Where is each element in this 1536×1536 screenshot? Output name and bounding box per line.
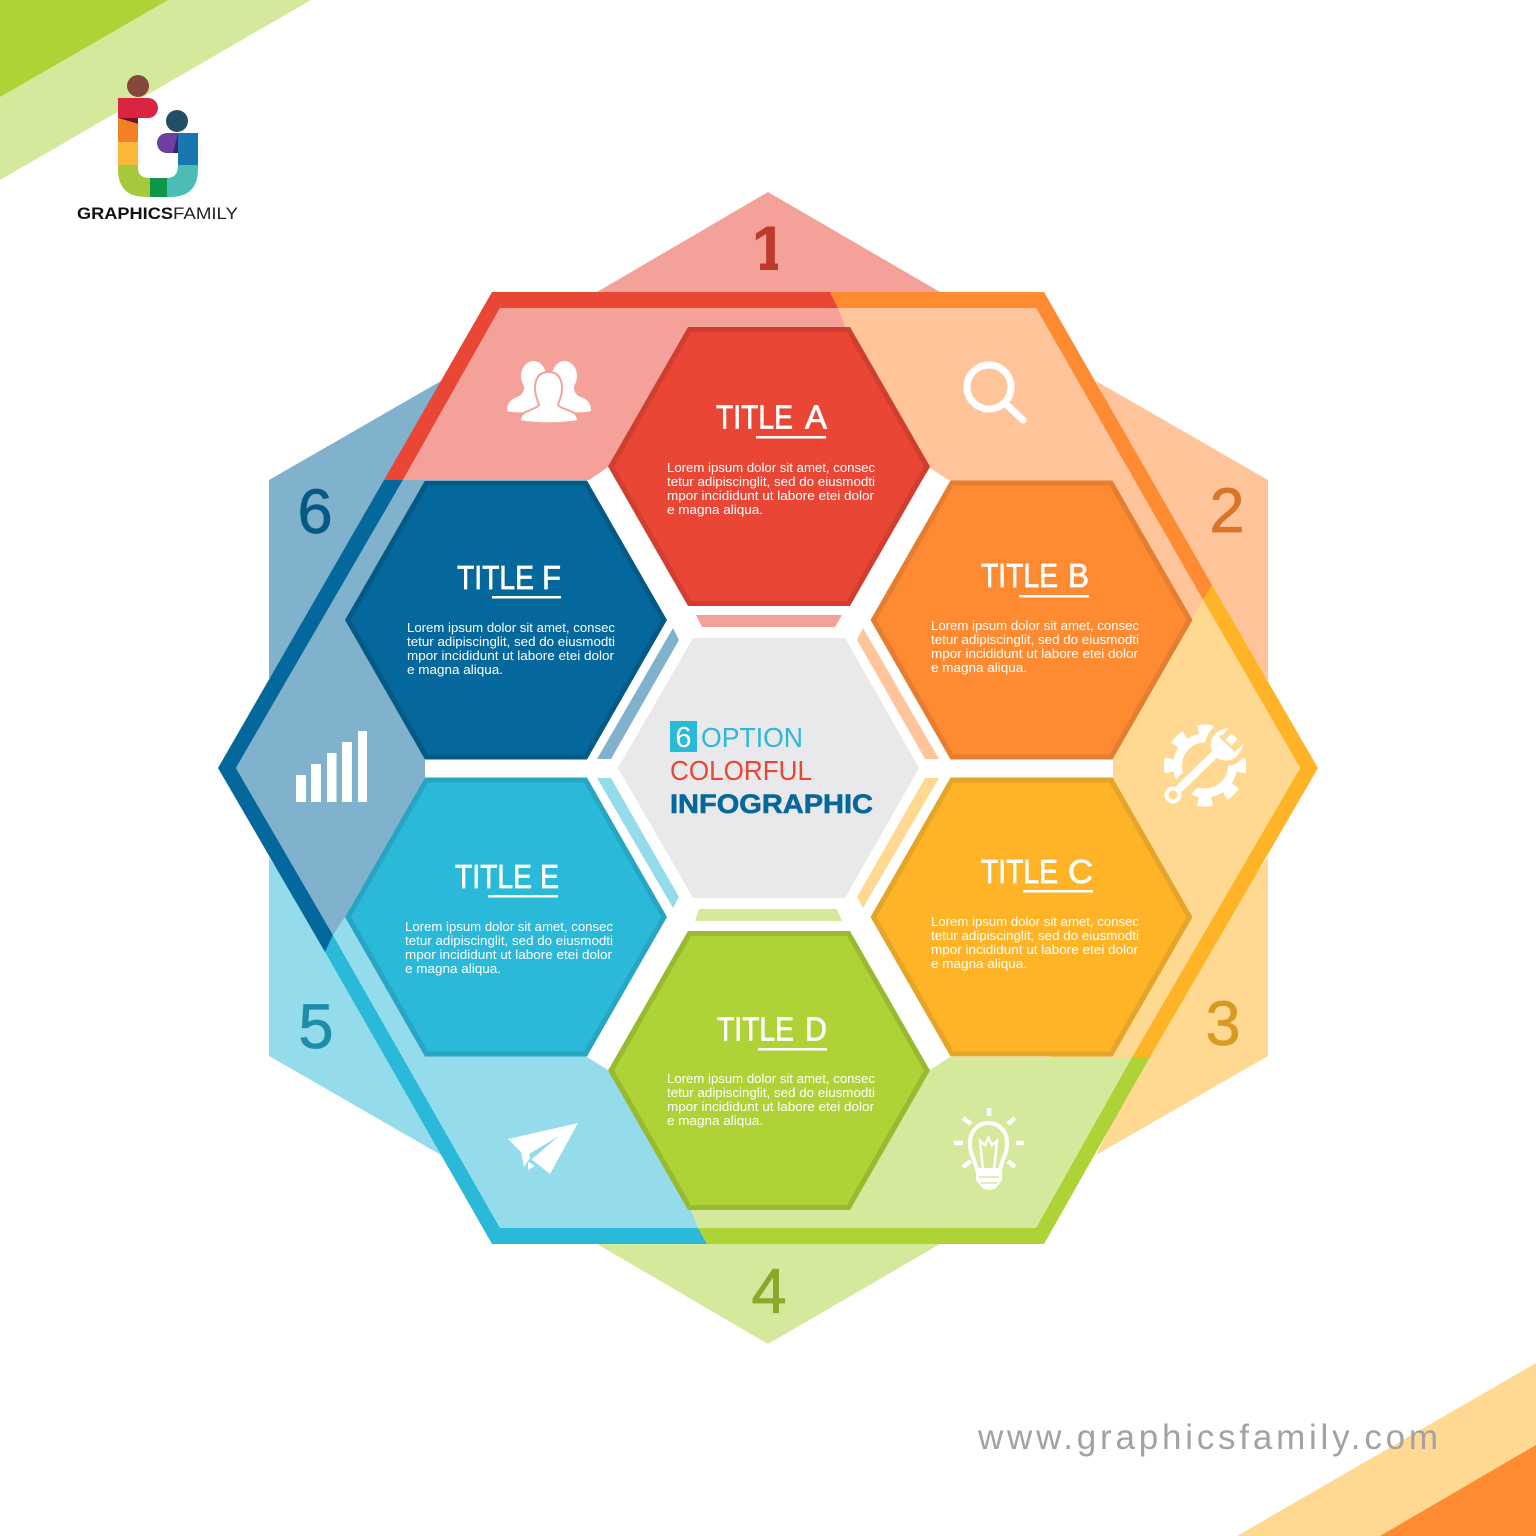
hexagon B: TITLE xyxy=(981,557,1058,594)
hexagon E: Lorem ipsum dolor sit amet, consec xyxy=(405,919,613,934)
hexagon B: B xyxy=(1068,557,1089,594)
center hexagon xyxy=(618,638,919,898)
hexagon C: C xyxy=(1068,853,1093,890)
outer hexagon piece 2 xyxy=(1096,381,1268,681)
hexagon B xyxy=(870,480,1192,760)
icon: magnifier xyxy=(967,365,1023,420)
hexagon F: TITLE xyxy=(457,559,534,596)
hexagon A: A xyxy=(805,398,827,436)
number 4: 4 xyxy=(751,1257,787,1327)
hexagon B: Lorem ipsum dolor sit amet, consec xyxy=(931,618,1139,633)
hexagon F: F xyxy=(542,559,561,596)
segment 6 panel xyxy=(218,480,425,952)
trapezoid: green xyxy=(695,909,842,921)
segment 5 panel xyxy=(325,917,707,1244)
segment 1 panel xyxy=(384,292,850,480)
hexagon D: mpor incididunt ut labore etei dolor xyxy=(667,1099,875,1114)
segment 4 panel xyxy=(680,1057,1150,1244)
icon: paper plane xyxy=(508,1123,578,1174)
hexagon E: mpor incididunt ut labore etei dolor xyxy=(405,947,613,962)
hexagon E: e magna aliqua. xyxy=(405,961,501,976)
hexagon C xyxy=(870,778,1192,1056)
outer hexagon piece 1 xyxy=(597,192,940,330)
trapezoid: yellow xyxy=(857,778,939,908)
hexagon E: E xyxy=(540,858,559,895)
hexagon C: mpor incididunt ut labore etei dolor xyxy=(931,942,1139,957)
trapezoid: cyan xyxy=(597,778,679,908)
logo: FAMILY xyxy=(173,204,238,223)
hexagon A: tetur adipiscinglit, sed do eiusmodti xyxy=(667,474,875,489)
hexagon A xyxy=(608,327,930,606)
number 6: 6 xyxy=(297,477,333,547)
outer hexagon piece 3 xyxy=(1096,857,1268,1155)
trapezoid: dark blue xyxy=(597,628,679,759)
icon: gear and wrench xyxy=(1166,724,1247,804)
icon: people xyxy=(507,361,591,423)
trapezoid: red xyxy=(696,615,842,627)
hexagon A: mpor incididunt ut labore etei dolor xyxy=(667,488,875,503)
hexagon E: tetur adipiscinglit, sed do eiusmodti xyxy=(405,933,613,948)
logo xyxy=(77,75,238,223)
number 5: 5 xyxy=(298,992,334,1062)
hexagon B: tetur adipiscinglit, sed do eiusmodti xyxy=(931,632,1139,647)
icon: bars xyxy=(296,731,367,802)
hexagon D: Lorem ipsum dolor sit amet, consec xyxy=(667,1071,875,1086)
hexagon A: e magna aliqua. xyxy=(667,502,763,517)
outer hexagon piece 5 xyxy=(269,857,441,1155)
hexagon D: tetur adipiscinglit, sed do eiusmodti xyxy=(667,1085,875,1100)
hexagon A: TITLE xyxy=(716,398,793,436)
outer hexagon piece 6 xyxy=(269,381,441,679)
hexagon C: tetur adipiscinglit, sed do eiusmodti xyxy=(931,928,1139,943)
segment 2 panel xyxy=(830,292,1212,760)
number 1: 1 xyxy=(751,214,787,284)
hexagon C: e magna aliqua. xyxy=(931,956,1027,971)
hexagon F: Lorem ipsum dolor sit amet, consec xyxy=(407,620,615,635)
segment 3 panel xyxy=(1050,585,1318,1057)
logo: GRAPHICS xyxy=(77,204,173,223)
center title: COLORFUL xyxy=(670,755,812,786)
corner decoration: top left xyxy=(0,0,311,180)
hexagon D: TITLE xyxy=(717,1010,794,1048)
hexagon B: mpor incididunt ut labore etei dolor xyxy=(931,646,1139,661)
icon: light bulb xyxy=(954,1108,1024,1190)
outer hexagon piece 4 xyxy=(597,1210,940,1344)
hexagon C: Lorem ipsum dolor sit amet, consec xyxy=(931,914,1139,929)
hexagon A: Lorem ipsum dolor sit amet, consec xyxy=(667,460,875,475)
number 3: 3 xyxy=(1205,989,1241,1059)
corner decoration: bottom right xyxy=(1237,1363,1536,1536)
hexagon D: D xyxy=(805,1010,827,1048)
hexagon F xyxy=(345,480,667,760)
trapezoid: orange xyxy=(857,628,939,759)
hexagon F: mpor incididunt ut labore etei dolor xyxy=(407,648,615,663)
number 2: 2 xyxy=(1209,476,1245,546)
hexagon E xyxy=(345,778,667,1056)
center title: INFOGRAPHIC xyxy=(670,789,873,819)
center title: OPTION xyxy=(701,722,803,753)
website url: www.graphicsfamily.com xyxy=(977,1418,1438,1457)
hexagon F: tetur adipiscinglit, sed do eiusmodti xyxy=(407,634,615,649)
white gaps between hexagons xyxy=(425,759,1113,778)
hexagon F: e magna aliqua. xyxy=(407,662,503,677)
hexagon E: TITLE xyxy=(455,858,532,895)
hexagon B: e magna aliqua. xyxy=(931,660,1027,675)
hexagon D xyxy=(608,931,930,1210)
center title xyxy=(670,721,873,819)
hexagon C: TITLE xyxy=(981,853,1058,890)
hexagon D: e magna aliqua. xyxy=(667,1113,763,1128)
center title: 6 xyxy=(675,722,692,754)
